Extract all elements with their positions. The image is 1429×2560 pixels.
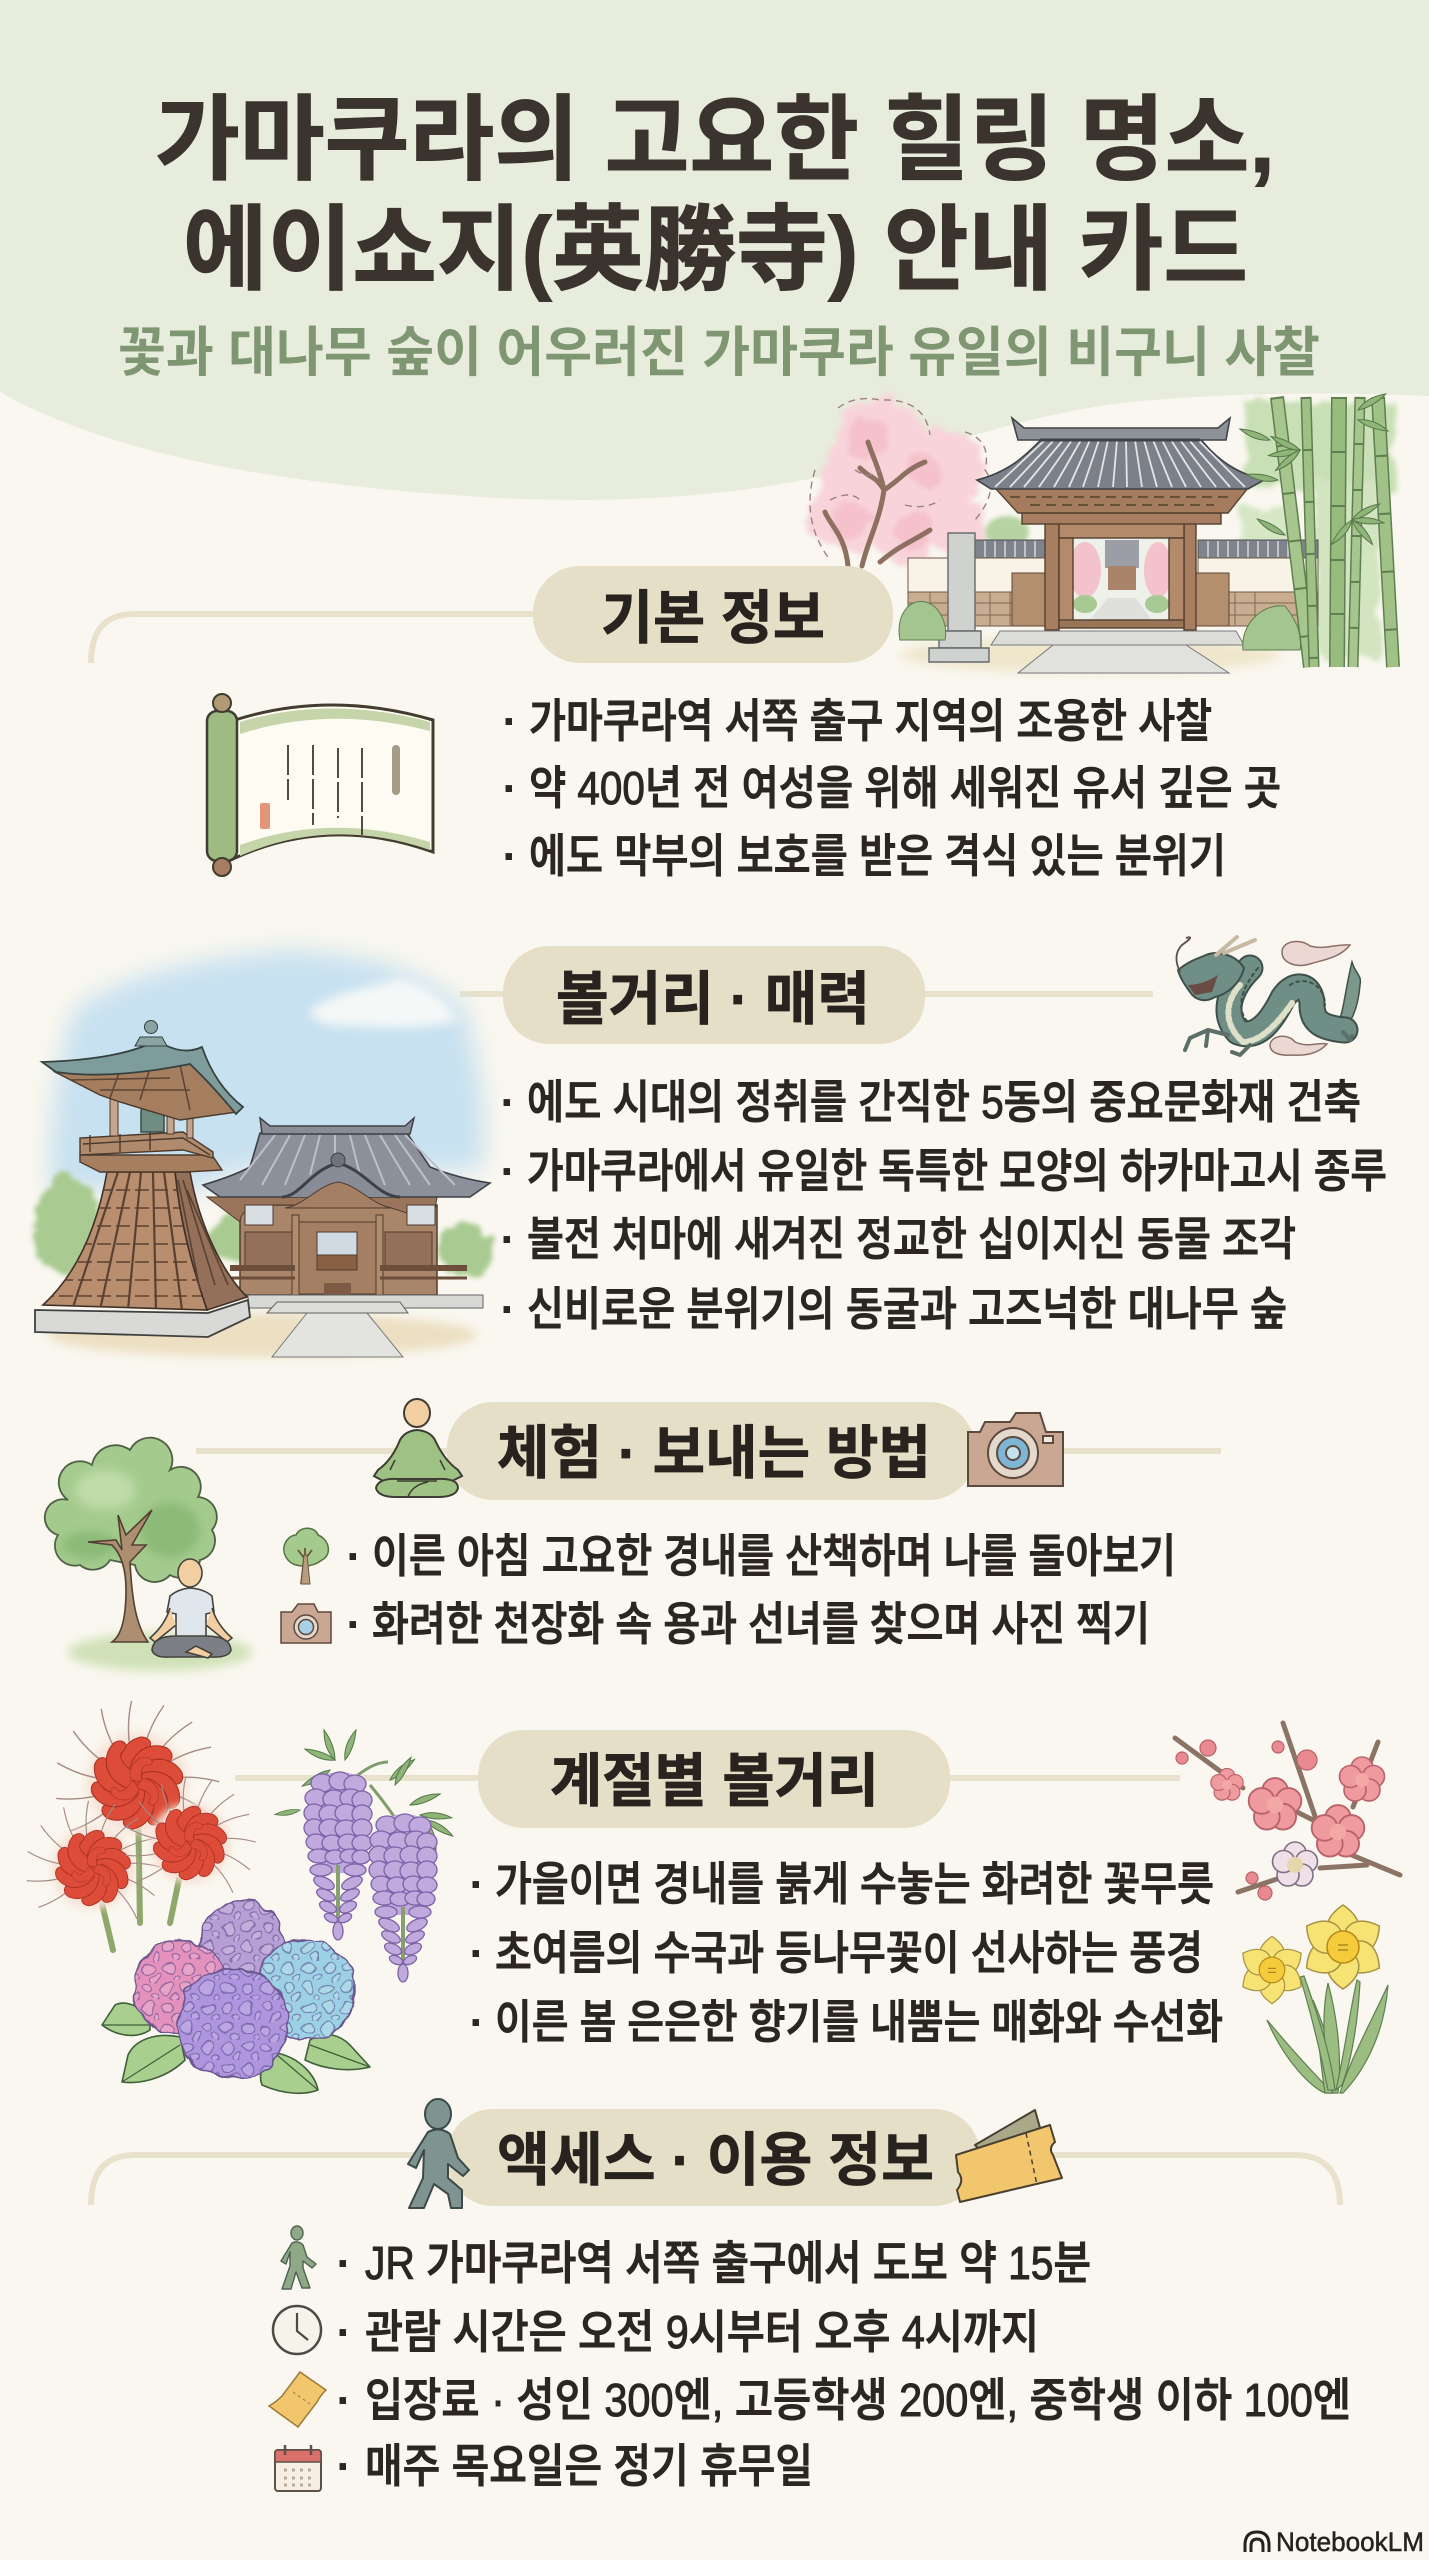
sky wash bbox=[50, 950, 484, 1190]
list: seasons bbox=[469, 1858, 1223, 2048]
illustration: wisteria bbox=[274, 1729, 454, 1982]
heading pill: highlights bbox=[503, 946, 925, 1044]
illustration: temple gate with cherry tree and bamboo bbox=[809, 391, 1395, 673]
cloud bbox=[310, 978, 457, 1028]
ground wash bbox=[900, 637, 1280, 673]
heading pill: experience bbox=[447, 1402, 975, 1500]
stone monument bbox=[929, 533, 989, 662]
illustration: person meditating under tree bbox=[45, 1438, 252, 1671]
list: basic info: 에도 막부의 보호를 받은 격식 있는 분위기 bbox=[529, 830, 1226, 882]
icon: small walking person bbox=[281, 2226, 316, 2289]
list: basic info: 약 400년 전 여성을 위해 세워진 유서 깊은 곳 bbox=[529, 762, 1281, 814]
bamboo culms bbox=[1277, 397, 1393, 667]
stone path bbox=[1018, 645, 1229, 673]
gate roof bbox=[977, 418, 1264, 489]
cherry tree bbox=[809, 399, 991, 566]
icon: scroll bbox=[207, 694, 433, 876]
bell bbox=[110, 1098, 193, 1138]
heading pill: highlights: 볼거리 · 매력 bbox=[556, 967, 870, 1032]
opening view bbox=[1069, 538, 1172, 620]
icon: walking person bbox=[408, 2099, 469, 2208]
list: highlights: · bbox=[500, 1145, 516, 1197]
heading pill: experience: 체험 · 보내는 방법 bbox=[497, 1421, 931, 1486]
tree trunk bbox=[88, 1510, 152, 1642]
bell tower body bbox=[40, 1172, 247, 1310]
list: highlights: · bbox=[500, 1283, 516, 1335]
pale plum blossom bbox=[1272, 1842, 1318, 1886]
gate side panels bbox=[1012, 573, 1045, 626]
list: access: JR 가마쿠라역 서쪽 출구에서 도보 약 15분 bbox=[365, 2237, 1091, 2289]
list: seasons: · bbox=[469, 1996, 485, 2048]
list: highlights bbox=[500, 1076, 1387, 1335]
icon: clock bbox=[273, 2306, 321, 2354]
list: basic info: · bbox=[502, 695, 518, 747]
list: access: · bbox=[336, 2306, 352, 2358]
title: 에이쇼지(英勝寺) 안내 카드 bbox=[183, 198, 1248, 302]
list: experience: 화려한 천장화 속 용과 선녀를 찾으며 사진 찍기 bbox=[372, 1598, 1150, 1650]
icon: calendar bbox=[275, 2445, 321, 2491]
heading pill: seasons: 계절별 볼거리 bbox=[550, 1749, 879, 1814]
main hall bbox=[207, 1197, 483, 1313]
list: experience bbox=[346, 1530, 1176, 1650]
icon: meditating person bbox=[374, 1399, 462, 1497]
list: highlights: 신비로운 분위기의 동굴과 고즈넉한 대나무 숲 bbox=[527, 1283, 1287, 1335]
heading pill: seasons bbox=[478, 1730, 950, 1828]
heading pill: basic info: 기본 정보 bbox=[601, 586, 825, 651]
list: highlights: 불전 처마에 새겨진 정교한 십이지신 동물 조각 bbox=[527, 1213, 1296, 1265]
title: 가마쿠라의 고요한 힐링 명소, bbox=[155, 88, 1275, 192]
section line: highlights bbox=[460, 991, 1153, 997]
icon: small tree bbox=[284, 1528, 328, 1584]
list: access bbox=[336, 2237, 1351, 2492]
subtitle: 꽃과 대나무 숲이 어우러진 가마쿠라 유일의 비구니 사찰 bbox=[118, 323, 1320, 383]
shrubs bbox=[899, 601, 1301, 650]
hall roof bbox=[203, 1118, 490, 1208]
list: seasons: · bbox=[469, 1858, 485, 1910]
bamboo leaves bbox=[1239, 391, 1389, 547]
bell tower balcony bbox=[80, 1132, 222, 1172]
trees bbox=[32, 1175, 491, 1278]
list: access: 관람 시간은 오전 9시부터 오후 4시까지 bbox=[365, 2306, 1039, 2358]
section line: experience bbox=[196, 1448, 1221, 1454]
list: experience: · bbox=[346, 1530, 362, 1582]
distant bush bbox=[985, 516, 1029, 548]
bell tower roof bbox=[42, 1020, 243, 1120]
icon: dragon bbox=[1176, 937, 1360, 1055]
section line: seasons bbox=[235, 1775, 1180, 1781]
list: access: · bbox=[336, 2237, 352, 2289]
illustration: daffodils bbox=[1237, 1905, 1388, 2093]
list: seasons: · bbox=[469, 1927, 485, 1979]
list: basic info: · bbox=[502, 830, 518, 882]
section line: basic info bbox=[91, 614, 535, 663]
illustration: bell tower and main hall bbox=[32, 950, 491, 1357]
illustration: plum blossom branch bbox=[1175, 1723, 1400, 1900]
list: basic info: · bbox=[502, 762, 518, 814]
bell tower base bbox=[35, 1300, 250, 1337]
gate frame bbox=[995, 488, 1248, 630]
icon: ticket bbox=[956, 2110, 1062, 2202]
icon: camera bbox=[968, 1413, 1063, 1486]
illustration: red spider lilies bbox=[26, 1701, 256, 1950]
heading pill: basic info bbox=[533, 566, 893, 663]
title bbox=[155, 88, 1275, 302]
list: seasons: 이른 봄 은은한 향기를 내뿜는 매화와 수선화 bbox=[495, 1996, 1223, 2048]
wall bbox=[908, 540, 1318, 626]
list: seasons: 초여름의 수국과 등나무꽃이 선사하는 풍경 bbox=[495, 1927, 1203, 1979]
seated person bbox=[150, 1559, 232, 1658]
list: access: · bbox=[336, 2440, 352, 2492]
header wave bbox=[0, 0, 1429, 500]
list: seasons: 가을이면 경내를 붉게 수놓는 화려한 꽃무릇 bbox=[495, 1858, 1214, 1910]
bamboo foliage bbox=[1238, 402, 1395, 655]
list: highlights: · bbox=[500, 1076, 516, 1128]
NotebookLM logo: NotebookLM bbox=[1276, 2527, 1424, 2557]
list: access: 입장료 · 성인 300엔, 고등학생 200엔, 중학생 이하 100엔 bbox=[365, 2374, 1351, 2426]
list: access: · bbox=[336, 2374, 352, 2426]
list: highlights: · bbox=[500, 1213, 516, 1265]
stone path bbox=[272, 1313, 403, 1357]
list: access: 매주 목요일은 정기 휴무일 bbox=[365, 2440, 813, 2492]
heading pill: access bbox=[447, 2109, 980, 2206]
list: experience: 이른 아침 고요한 경내를 산책하며 나를 돌아보기 bbox=[372, 1530, 1176, 1582]
list: basic info: 가마쿠라역 서쪽 출구 지역의 조용한 사찰 bbox=[529, 695, 1212, 747]
tree canopy bbox=[45, 1438, 217, 1582]
section line: access bbox=[91, 2155, 1340, 2205]
list: basic info bbox=[502, 695, 1281, 882]
steps bbox=[991, 631, 1244, 645]
icon: small camera bbox=[281, 1604, 331, 1643]
icon: small ticket bbox=[269, 2372, 326, 2427]
list: experience: · bbox=[346, 1598, 362, 1650]
heading pill: access: 액세스 · 이용 정보 bbox=[497, 2128, 934, 2193]
ground bbox=[47, 1313, 477, 1357]
illustration: hydrangeas bbox=[102, 1901, 370, 2093]
